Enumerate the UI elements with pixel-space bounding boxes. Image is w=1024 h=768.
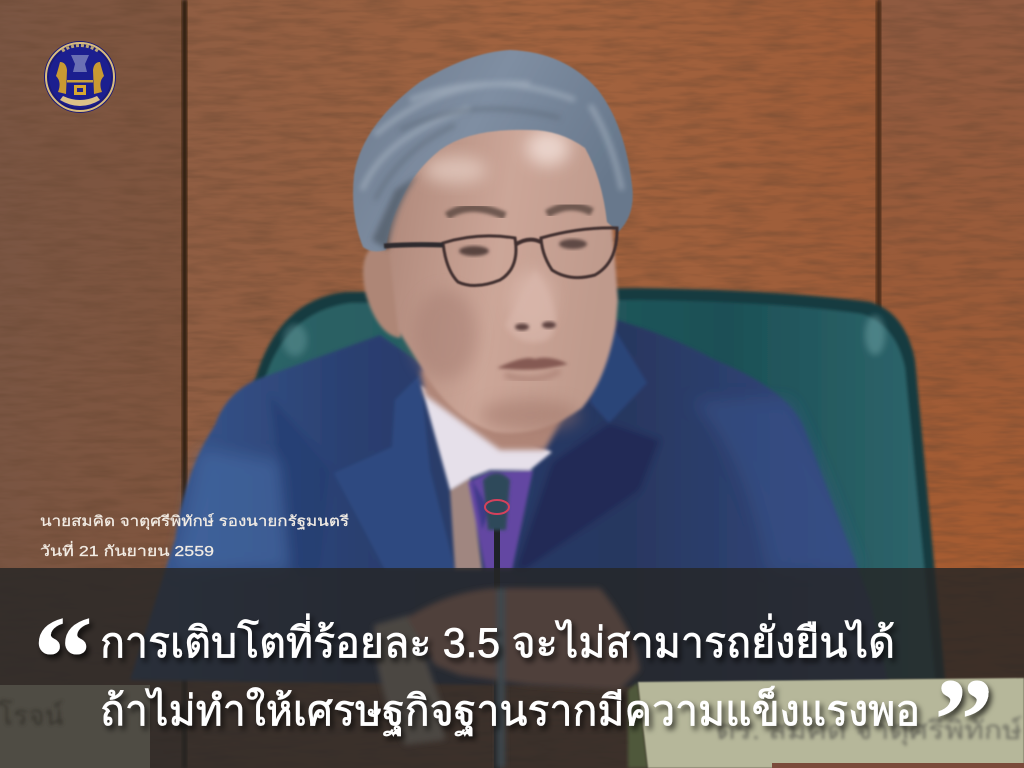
dark translucent caption band [0,568,1024,768]
face [388,111,618,433]
dark blue suit [130,318,890,690]
speaker name: นายสมคิด จาตุศรีพิทักษ์ รองนายกรัฐมนตรี [40,513,349,530]
microphone [483,473,510,768]
quote line 1: การเติบโตที่ร้อยละ 3.5 จะไม่สามารถยั่งยืนได้ [100,614,895,666]
right name plate [628,678,1024,768]
nose [505,270,556,342]
date: วันที่ 21 กันยายน 2559 [40,541,214,560]
left name plate [0,685,150,768]
shirt collar and tie [421,385,552,570]
headline quote [33,591,994,768]
plate name text: ดร. สมคิด จาตุศรีพิทักษ์ [716,715,1023,746]
opening quote mark: “ [33,591,93,724]
eyebrows [447,208,505,216]
hands and shirt cuff on table [374,588,640,768]
emblem: government seal [44,41,116,113]
teal chair [240,288,945,680]
caption: speaker name and date [40,513,349,560]
eyes [459,246,489,256]
ear [363,247,415,338]
head [353,50,633,450]
hair [353,50,633,251]
quote line 2: ถ้าไม่ทำให้เศรษฐกิจฐานรากมีความแข็งแรงพอ [100,686,920,736]
neck [420,360,575,450]
glasses [384,228,617,286]
mouth [497,358,568,370]
